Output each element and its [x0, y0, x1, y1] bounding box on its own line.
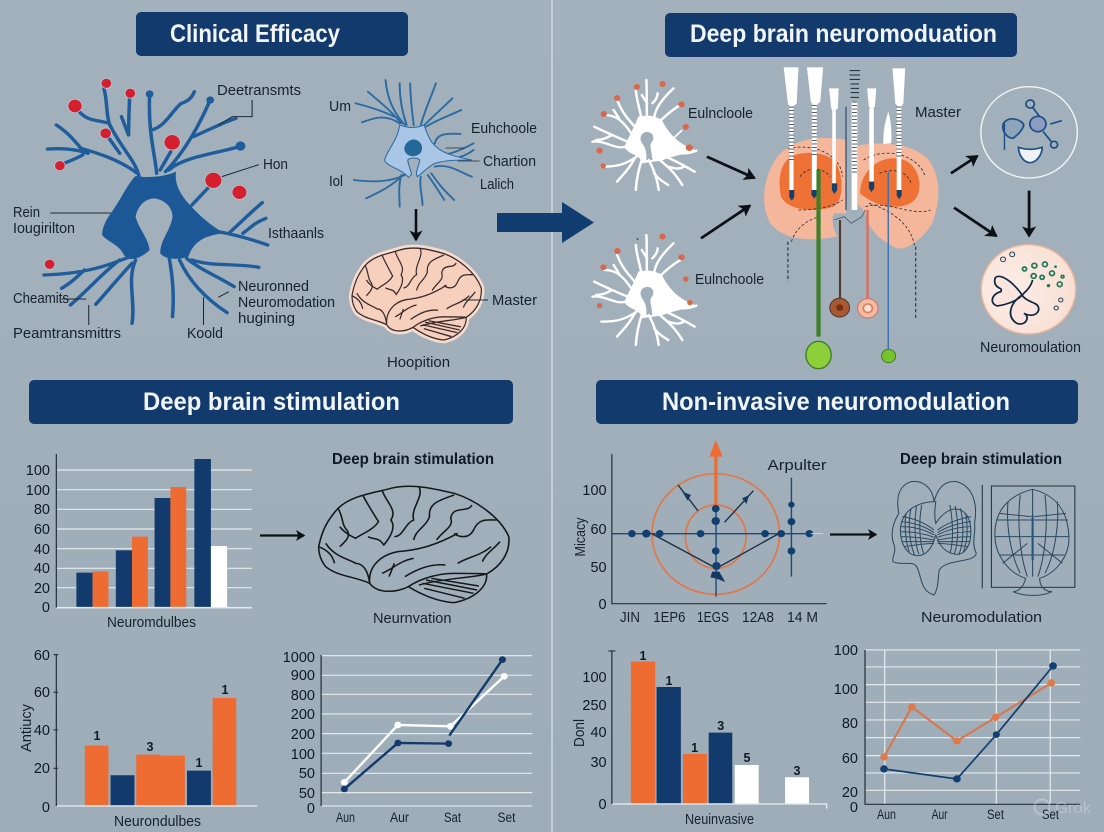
- line chart: right: Set: [1042, 807, 1059, 822]
- polar chart: Arpulter: 12A8: [742, 610, 774, 626]
- bar chart: Neurondulbes: 60: [34, 685, 50, 701]
- polar chart: Arpulter: 50: [590, 560, 607, 576]
- line chart: left: Set: [498, 810, 516, 825]
- polar chart: Arpulter: 1EGS: [697, 610, 729, 626]
- small neuron labels: Euhchoole: [471, 121, 537, 137]
- bar chart: Neuromdulbes: 40: [34, 542, 50, 558]
- line chart: right: 0: [850, 800, 858, 816]
- bar chart: Neuinvasive: 250: [582, 698, 607, 714]
- line chart: right: Set: [987, 807, 1004, 822]
- diagram: right scan: [991, 486, 1075, 595]
- bar chart: Neuinvasive: 1: [640, 649, 647, 663]
- arrow: polar chart to diagrams: [830, 533, 876, 536]
- line chart: right: 100: [834, 682, 858, 698]
- neuron labels: Neuromodation: [238, 295, 335, 311]
- big navy arrow: [497, 202, 594, 243]
- arrow: chart to brain: [260, 534, 304, 537]
- line chart: left: 1000: [283, 650, 315, 666]
- line chart: left: 800: [291, 688, 315, 704]
- bar chart: Neuromdulbes: 100: [26, 463, 50, 479]
- bar chart: Neurondulbes: 1: [222, 683, 229, 697]
- white neuron labels: [688, 106, 764, 288]
- bar chart: Neuinvasive: 3: [794, 764, 801, 778]
- line chart: right: 80: [842, 716, 858, 732]
- polar chart: Arpulter: JIN: [620, 610, 640, 626]
- bar chart: Neuinvasive: 40: [590, 725, 607, 741]
- white neuron labels: Eulncloole: [688, 106, 753, 122]
- line chart: right: 100: [834, 643, 858, 659]
- pink brain labels: [387, 293, 537, 371]
- label: Neuromodulation: Neuromodulation: [921, 610, 1042, 626]
- polar chart: Arpulter: 14 M: [787, 610, 818, 626]
- bar chart: Neurondulbes: 0: [42, 800, 50, 816]
- label: Neuromoulation: Neuromoulation: [980, 340, 1081, 356]
- bar chart: Neurondulbes: 20: [34, 761, 50, 777]
- bar chart: Neuromdulbes: 60: [34, 522, 50, 538]
- bar chart: Neuromdulbes: 0: [42, 600, 50, 616]
- icon: pink brain: [352, 248, 481, 340]
- brain cross-section with electrodes: [764, 67, 938, 369]
- bar chart: Neurondulbes: 1: [196, 756, 203, 770]
- small neuron labels: Iol: [329, 174, 343, 190]
- line chart: left: 50: [299, 766, 315, 782]
- polar chart: Arpulter: 60: [590, 522, 607, 538]
- heading: Deep brain stimulation: Deep brain stimulation: [143, 388, 400, 416]
- bar chart: Neuinvasive: 1: [666, 674, 673, 688]
- neuron diagram with red vesicles: [44, 78, 268, 325]
- arrows into brain section: [701, 157, 754, 238]
- watermark: Grok: [1034, 800, 1092, 817]
- small neuron labels: Chartion: [483, 154, 536, 170]
- heading: Clinical Efficacy: Clinical Efficacy: [170, 20, 340, 48]
- line chart: right: 60: [842, 751, 858, 767]
- small neuron labels: Um: [329, 99, 351, 115]
- line chart: left: 900: [291, 668, 315, 684]
- line chart: right: [834, 643, 1080, 822]
- bar chart: Neuinvasive: Donl: [572, 719, 588, 747]
- line chart: left: 100: [291, 747, 315, 763]
- line chart: left: 0: [307, 801, 315, 817]
- neuron labels: Cheamits: [13, 291, 69, 307]
- bar chart: Neuinvasive: 1: [691, 741, 698, 755]
- small neuron labels: Lalich: [480, 177, 514, 193]
- heading: Deep brain neuromoduation: [665, 13, 1017, 57]
- heading: Non-invasive neuromodulation: [596, 380, 1078, 424]
- circle: molecular detail: [981, 87, 1077, 178]
- line chart: left: 200: [291, 727, 315, 743]
- line chart: left: Aur: [390, 810, 409, 825]
- line chart: right: 20: [842, 785, 858, 801]
- neuron labels: Deetransmts: [217, 83, 301, 99]
- pink brain labels: Master: [492, 293, 537, 309]
- label: Neurnvation: Neurnvation: [373, 611, 452, 627]
- heading: Deep brain neuromoduation: Deep brain neuromoduation: [690, 20, 997, 48]
- bar chart: Neurondulbes: Neurondulbes: [114, 814, 201, 830]
- icon: outlined brain: [319, 486, 509, 603]
- heading: Deep brain stimulation small left: Deep brain stimulation: [332, 451, 494, 468]
- hemispheres: [764, 138, 938, 248]
- line chart: right: Aun: [877, 807, 896, 822]
- bar chart: Neuromdulbes: 40: [34, 561, 50, 577]
- heading: Deep brain stimulation: [29, 380, 513, 424]
- white neuron labels: Eulnchoole: [695, 272, 764, 288]
- neuron labels: Hon: [263, 157, 288, 173]
- line chart: left: Aun: [336, 810, 355, 825]
- arrows to circles: [951, 156, 1029, 236]
- neuron labels: Koold: [187, 326, 223, 342]
- electrodes: [784, 67, 905, 210]
- polar chart: Arpulter: Arpulter: [768, 458, 827, 474]
- white neuron bottom: [592, 234, 697, 345]
- bar chart: Neuinvasive: [572, 649, 827, 828]
- bar chart: Neurondulbes: 3: [147, 740, 154, 754]
- bar chart: Neuinvasive: 0: [599, 797, 607, 813]
- bar chart: Neuromdulbes: 80: [34, 502, 50, 518]
- dashed guide lines: [788, 242, 916, 320]
- bar chart: Neurondulbes: 60: [34, 648, 50, 664]
- neuron labels: Neuronned: [238, 279, 309, 295]
- line chart: left: 50: [299, 786, 315, 802]
- bar chart: Neurondulbes: 40: [34, 723, 50, 739]
- neuron labels: Peamtransmittrs: [13, 326, 121, 342]
- heading: Clinical Efficacy: [136, 12, 408, 56]
- colored stems and bulbs: [806, 170, 896, 369]
- heading: Non-invasive neuromodulation: Non-invasive neuromodulation: [662, 388, 1010, 416]
- bar chart: Neurondulbes: [19, 648, 257, 830]
- polar chart: Arpulter: 0: [599, 597, 607, 613]
- neuron labels: Rein: [13, 205, 40, 221]
- neuron labels: Iougirilton: [13, 221, 75, 237]
- small neuron labels: [329, 99, 537, 193]
- pink brain labels: Hoopition: [387, 355, 450, 371]
- neuron labels: [13, 83, 335, 342]
- arrow: neuron to brain: [415, 209, 417, 240]
- bar chart: Neurondulbes: 1: [94, 729, 101, 743]
- line chart: left: [283, 650, 532, 825]
- bar chart: Neuromdulbes: Neuromdulbes: [107, 615, 196, 631]
- divider line: [981, 485, 984, 588]
- bar chart: Neuinvasive: 3: [717, 719, 724, 733]
- diagram: left scan: [892, 481, 976, 595]
- line chart: left: Sat: [444, 810, 461, 825]
- scan diagrams: [892, 481, 1075, 595]
- white neuron top: [592, 80, 697, 190]
- line chart: left: 200: [291, 707, 315, 723]
- bar chart: Neuinvasive: Neuinvasive: [685, 812, 754, 828]
- watermark: Grok: Grok: [1055, 800, 1092, 817]
- polar chart: Arpulter: [573, 440, 827, 626]
- polar chart: Arpulter: 1EP6: [653, 610, 685, 626]
- bar chart: Neuinvasive: 5: [744, 751, 751, 765]
- neuron labels: Isthaanls: [268, 226, 324, 242]
- circle: cell detail: [981, 245, 1076, 334]
- label: Master: Master: [915, 105, 961, 121]
- line chart: right: Aur: [932, 807, 948, 822]
- bar chart: Neuromdulbes: 100: [26, 483, 50, 499]
- bar chart: Neurondulbes: Antiucy: [19, 703, 35, 752]
- heading: Deep brain stimulation small right: Deep brain stimulation: [900, 451, 1062, 468]
- polar chart: Arpulter: 100: [582, 483, 607, 499]
- bar chart: Neuromdulbes: [26, 454, 252, 631]
- polar chart: Arpulter: Micacy: [573, 517, 589, 556]
- bar chart: Neuromdulbes: 20: [34, 581, 50, 597]
- small blue neuron: [354, 80, 480, 207]
- neuron labels: hugining: [238, 311, 295, 327]
- bar chart: Neuinvasive: 30: [590, 755, 607, 771]
- bar chart: Neuinvasive: 100: [582, 670, 607, 686]
